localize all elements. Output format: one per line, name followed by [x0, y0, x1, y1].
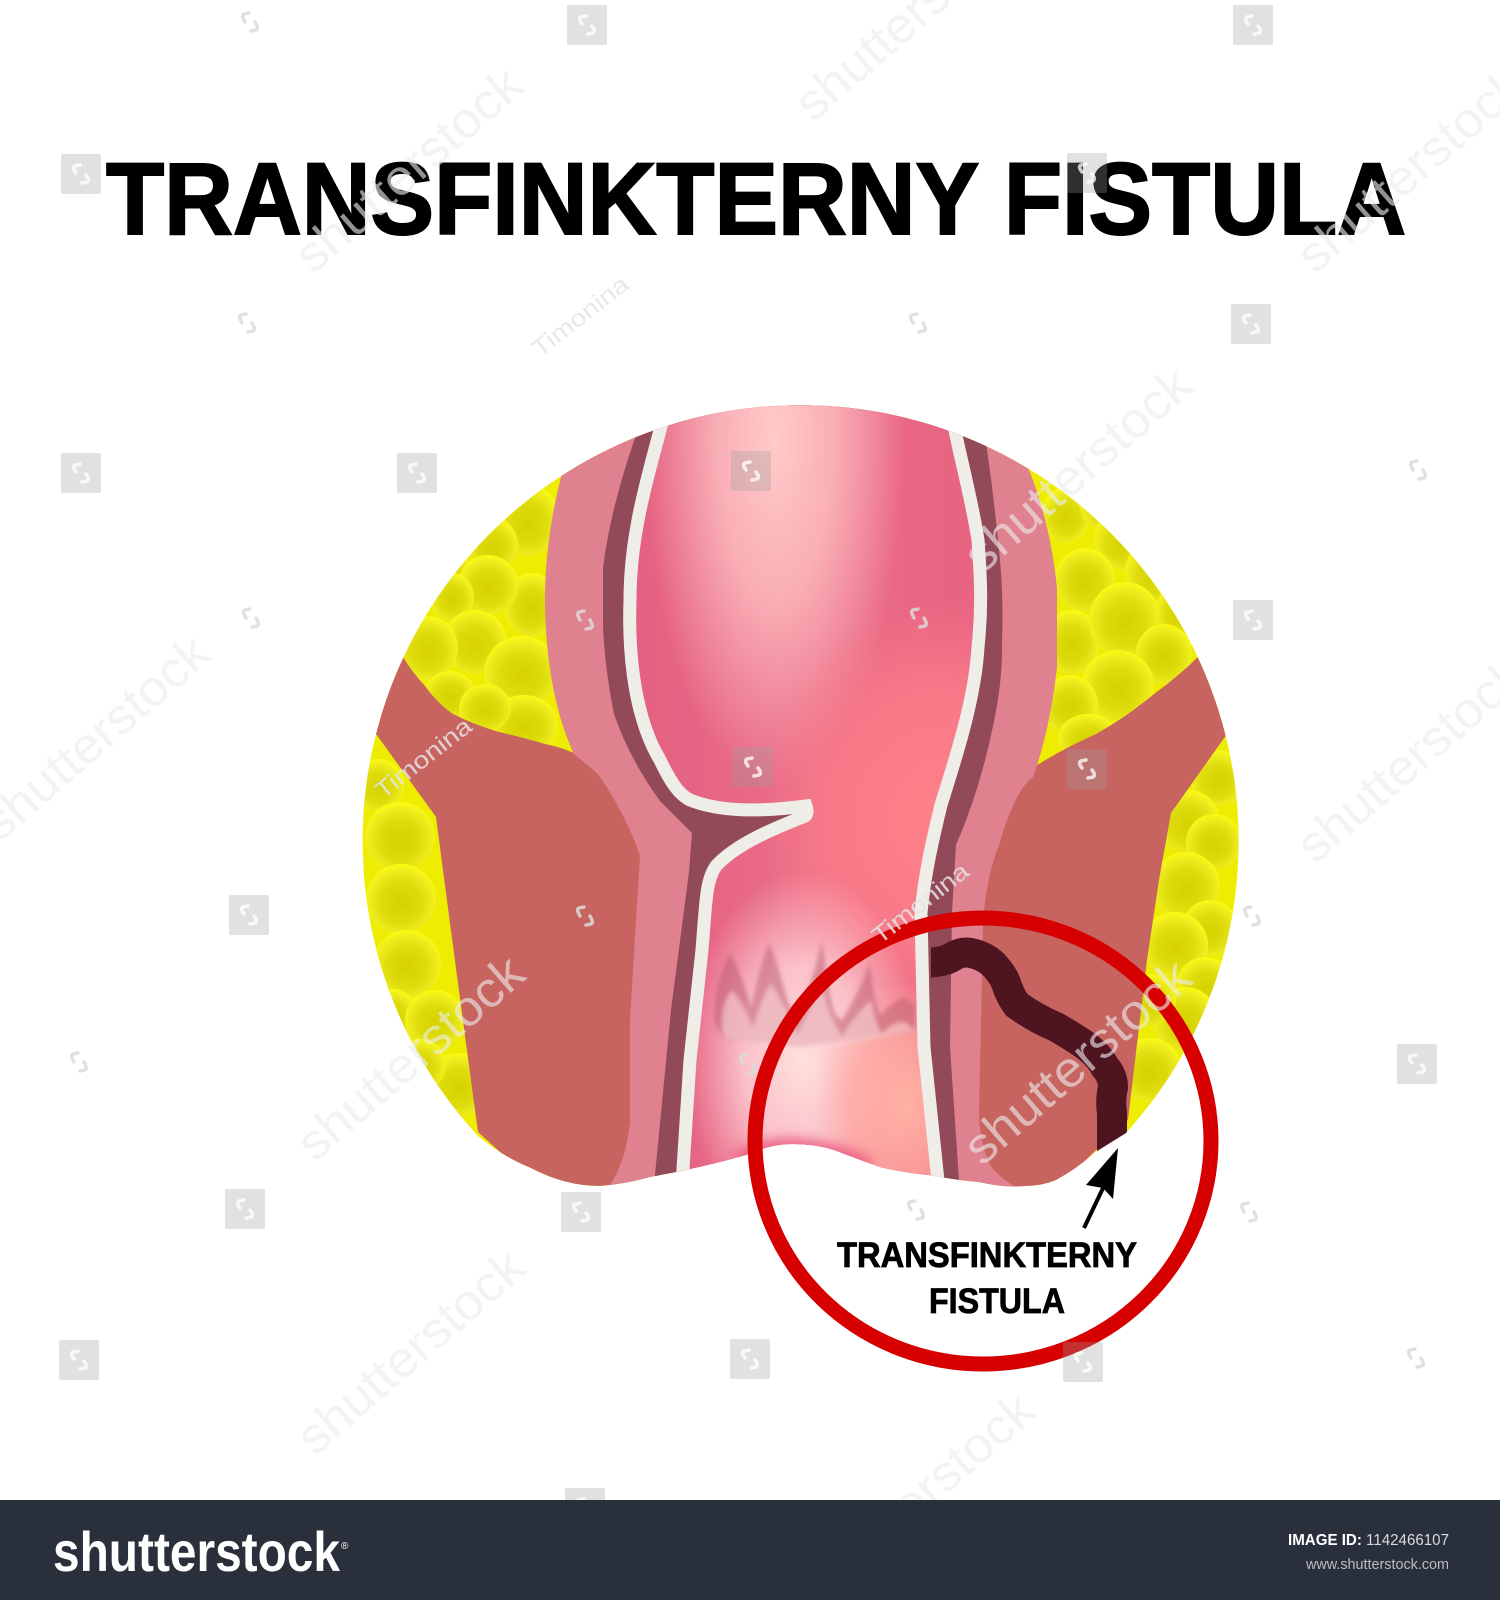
- stock watermark text: shutterstock: [952, 355, 1203, 583]
- peach bottom right tint: [823, 990, 936, 1176]
- footer logo: shutterstock: [53, 1520, 341, 1583]
- watermark swirl icons: [72, 13, 1425, 1367]
- anal canal lumen: [636, 405, 974, 1176]
- registered mark: ®: [341, 1541, 349, 1552]
- anal columns dark folds: [714, 940, 915, 1046]
- anatomical cross-section diagram: [362, 405, 1239, 1186]
- stock watermark text: shutterstock: [283, 55, 534, 283]
- anal columns pale folds: [722, 983, 915, 1048]
- upper highlight: [654, 405, 897, 764]
- title: TRANSFINKTERNY FISTULA: [106, 142, 1406, 256]
- fat globules: [352, 470, 1246, 1117]
- image id: IMAGE ID: 1142466107: [1288, 1532, 1449, 1549]
- lower pale highlight: [694, 880, 906, 1166]
- clipped tissue layers: [362, 405, 1239, 1186]
- fistula tract: [925, 952, 1113, 1160]
- bottom edge flush: [735, 1145, 870, 1166]
- author watermark text: Timonina: [867, 857, 975, 950]
- stock watermark text: shutterstock: [285, 1237, 536, 1465]
- stock watermark text: shutterstock: [285, 943, 536, 1171]
- arrow to fistula opening: [1084, 1148, 1118, 1228]
- dark fold of the dentate notch: [660, 800, 692, 845]
- fat tissue base: [350, 400, 1250, 1200]
- right muscle: [960, 657, 1226, 1186]
- lumen base colour: [636, 405, 974, 1176]
- author watermark text: Timonina: [527, 270, 635, 363]
- stock watermark text: shutterstock: [952, 947, 1203, 1175]
- site url: www.shutterstock.com: [1305, 1556, 1449, 1573]
- lumen white lining: [630, 380, 981, 1200]
- fistula label: FISTULA: [929, 1282, 1065, 1321]
- author watermark text: [370, 270, 975, 950]
- fistula label: [837, 1236, 1137, 1321]
- pink sphincter band: [545, 380, 1057, 1195]
- author watermark text: Timonina: [370, 712, 478, 805]
- fistula label: TRANSFINKTERNY: [837, 1236, 1137, 1275]
- footer bar: [0, 1500, 1500, 1600]
- dark muscle layer: [603, 380, 1002, 1195]
- red highlight circle: [755, 918, 1211, 1364]
- salmon lower right tint: [796, 637, 972, 992]
- left muscle: [376, 658, 660, 1186]
